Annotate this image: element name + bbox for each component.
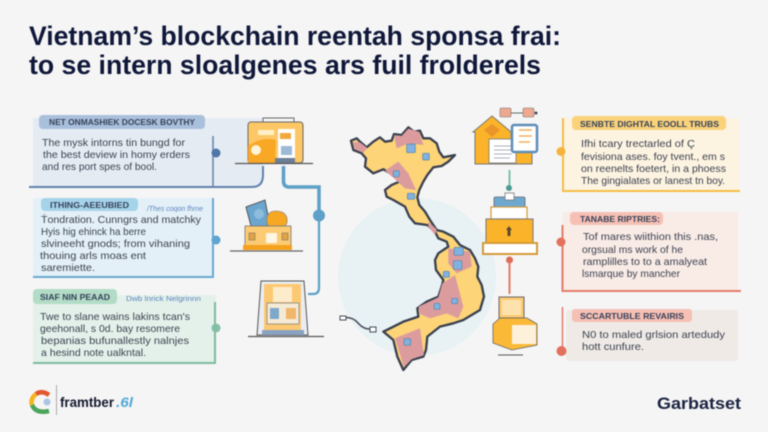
icon: stacked box (483, 193, 537, 254)
icon: small connector (500, 108, 538, 117)
body text: Ifhi tcary trectarled of Ç (581, 138, 695, 150)
tag (572, 116, 726, 130)
title (29, 21, 561, 80)
body text: bepanias bufunallestly nalnjes (41, 335, 189, 347)
panel: left bottom (33, 289, 220, 363)
small note: /Thes coqon fhrne (146, 204, 203, 213)
body text (40, 213, 202, 274)
body text: ramplilles to to a amalyeat (583, 256, 707, 268)
tag (572, 309, 692, 322)
tag: ITHING-AEEUBIED (50, 200, 129, 210)
body text: Hyis hig ehinck ha berre (41, 226, 146, 238)
body text: orgsual ms work of he (582, 244, 683, 256)
arrow: red connector (506, 256, 513, 294)
tag: SCCARTUBLE REVAIRIS (580, 311, 684, 321)
panel: left top (29, 115, 263, 187)
title: to se intern sloalgenes ars fuil frolderels (29, 50, 541, 80)
map land (351, 127, 484, 370)
logo text: framtber (60, 394, 115, 410)
small note: Dwb lnrick Nelgrinnn (126, 296, 201, 303)
panel: left middle (33, 198, 220, 277)
panel: right middle (556, 212, 741, 291)
body text: The mysk intorns tin bungd for (42, 137, 186, 149)
panel: right bottom (556, 307, 738, 361)
tag (39, 115, 205, 129)
dot (212, 148, 220, 158)
dot (556, 346, 566, 356)
logo: left (32, 385, 134, 415)
body text: the best deview in homy erders (43, 149, 190, 161)
icon: briefcase (235, 118, 313, 164)
body text: on reenelts foetert, in a phoess (581, 163, 726, 175)
tag (570, 212, 663, 225)
tag (41, 198, 138, 211)
body text: Tof mares wiithion this .nas, (583, 231, 718, 243)
logo mark (32, 392, 50, 412)
map markers (393, 144, 463, 345)
dot (556, 147, 566, 156)
icon: laptop box (493, 297, 537, 355)
logo: left: .6l (116, 394, 134, 410)
icon: house with tablet (473, 116, 537, 164)
body text: slvineeht gnods; from vihaning (41, 238, 190, 250)
body text: N0 to maled grlsion artedudy (582, 329, 726, 341)
body text: The gingialates or lanest tn boy. (581, 175, 725, 187)
tag: SIAF NIN PEAAD (40, 292, 110, 302)
panel: right top (556, 116, 740, 191)
tag: TANABE RIPTRIES: (580, 214, 660, 224)
dot (556, 238, 566, 246)
body text (581, 138, 726, 187)
icon: books on box (230, 200, 303, 251)
body text (582, 329, 726, 353)
body text: saremiette. (41, 262, 95, 274)
body text: thouing arls moas ent (40, 250, 146, 262)
dot (212, 324, 220, 332)
tag (33, 289, 117, 304)
map: Vietnam (351, 127, 484, 370)
body text: lsmarque by mancher (582, 268, 680, 280)
arrow: green connector (506, 170, 512, 191)
body text: fevisiona ases. foy tvent., em s (581, 151, 725, 163)
arrow: blue connector (284, 166, 325, 294)
logo: right: Garbatset (657, 394, 741, 413)
body text: hott cunfure. (582, 341, 644, 353)
body text: geehonall, s 0d. bay resomere (40, 323, 180, 335)
body text: Ṫondration. Cunngrs and matchky (41, 213, 202, 226)
dot (212, 236, 220, 244)
body text: Twe to slane wains lakins tcan's (40, 311, 190, 323)
cable icon (340, 316, 376, 332)
body text: and res port spes of bool. (42, 161, 157, 173)
body text (42, 137, 190, 173)
title: Vietnam’s blockchain reentah sponsa frai: (29, 21, 561, 51)
body text (40, 311, 190, 359)
body text (582, 231, 718, 280)
tag: NET ONMASHIEK DOCESK BOVTHY (49, 117, 195, 127)
icon: tablet (248, 281, 324, 336)
tag: SENBTE DIGHTAL EOOLL TRUBS (580, 119, 719, 129)
body text: a hesind note ualkntal. (41, 347, 146, 359)
map circle background (338, 198, 496, 356)
map regions (353, 129, 472, 367)
